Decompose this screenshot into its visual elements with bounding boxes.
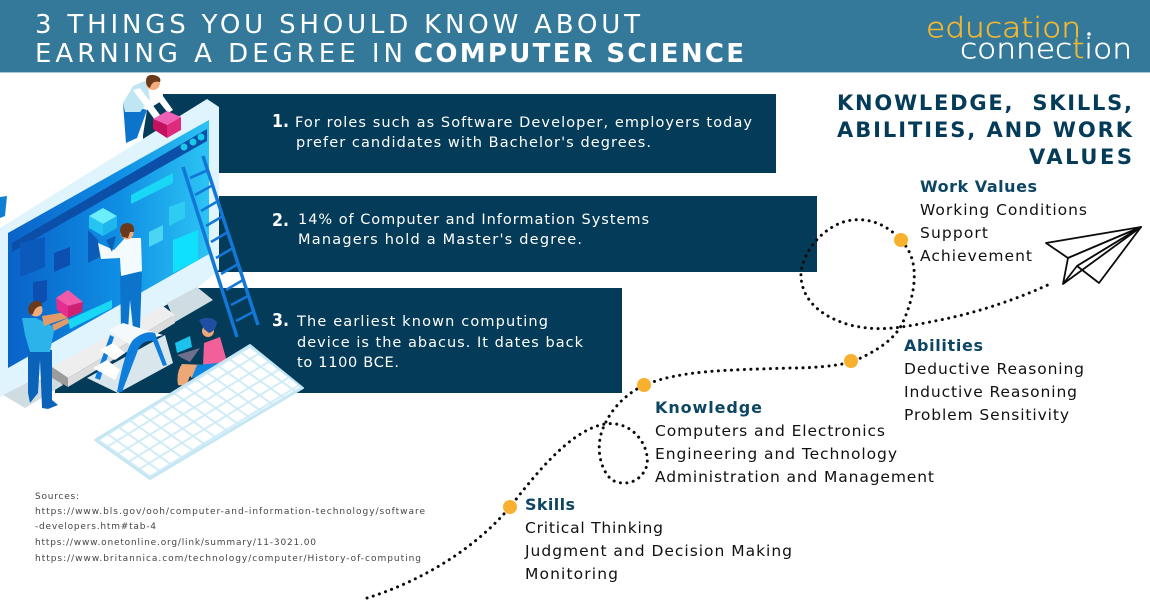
fact 2 text: 2. [272,210,289,231]
fact 1 text: 1. [272,111,289,132]
worker on top [123,75,173,143]
logo: education connection: connec tion [960,32,1132,65]
sources [35,492,425,564]
fact 1 text: prefer candidates with Bachelor's degrees. [296,135,651,151]
header bar [0,0,1150,73]
cyan cube [89,208,117,236]
knowledge list: Knowledge [655,398,762,417]
panel 3 [55,288,622,393]
illustration: isometric computer with workers [0,75,303,479]
title [35,10,744,69]
work values list: Support [920,224,988,242]
panel 2 [165,196,817,272]
screen title band [12,129,207,252]
work values list: Achievement [920,247,1032,265]
worker at screen [98,223,142,331]
skills list: Monitoring [525,565,618,583]
sources: https://www.bls.gov/ooh/computer-and-information-technology/software [35,507,425,517]
fact 1 text: For roles such as Software Developer, employers today [295,115,752,131]
pink cube top [153,111,181,138]
fact 2 text: Managers hold a Master's degree. [298,232,582,248]
abilities list: Abilities [904,336,983,355]
fact 3 text [272,310,584,371]
title: COMPUTER SCIENCE [414,39,744,69]
riser box under screen [52,306,175,387]
title: EARNING A DEGREE IN [35,39,403,69]
dotted flight path [367,220,1052,598]
abilities list [904,336,1084,424]
stool [93,323,167,392]
pink cube left [56,290,83,318]
monitor floor shadow [3,377,63,408]
icon: paper airplane [1046,227,1141,284]
screen tiles [20,173,198,329]
worker at left [22,301,69,409]
path milestones [503,233,908,514]
ladder [183,156,258,337]
section heading [837,91,1133,169]
knowledge list: Computers and Electronics [655,422,885,440]
panel 1 [143,94,776,173]
knowledge list: Engineering and Technology [655,445,897,463]
desk shadow right [167,287,213,322]
abilities list: Problem Sensitivity [904,406,1069,424]
work values list [920,177,1087,265]
floor under stool [87,335,173,393]
monitor screen [8,120,209,368]
section heading: VALUES [1029,145,1132,169]
work values list: Work Values [920,177,1037,196]
abilities list: Inductive Reasoning [904,383,1077,401]
small cup icon at edge [0,196,7,218]
fact 3 text: to 1100 BCE. [297,355,399,371]
knowledge list [655,398,934,486]
fact 2 text: 14% of Computer and Information Systems [298,212,649,228]
sources: Sources: [35,492,79,502]
fact 3 text: The earliest known computing [296,314,548,330]
keyboard [95,345,303,479]
sources: https://www.onetonline.org/link/summary/11-3021.00 [35,538,316,548]
fact 2 text [272,210,649,248]
logo: education connection: education [926,11,1081,44]
knowledge list: Administration and Management [655,468,934,486]
skills list: Judgment and Decision Making [524,542,792,560]
title: 3 THINGS YOU SHOULD KNOW ABOUT [35,10,640,40]
work values list: Working Conditions [920,201,1087,219]
sources: https://www.britannica.com/technology/computer/History-of-computing [35,554,421,564]
skills list [524,495,792,583]
monitor bezel [0,99,219,397]
section heading: ABILITIES, AND WORK [837,118,1133,142]
fact 3 text: device is the abacus. It dates back [297,335,584,351]
fact 3 text: 3. [272,310,289,331]
skills list: Critical Thinking [525,519,663,537]
abilities list: Deductive Reasoning [904,360,1084,378]
screen window dots [180,134,204,150]
skills list: Skills [525,495,575,514]
section heading: KNOWLEDGE, SKILLS, [837,91,1132,115]
seated woman with laptop [175,318,226,386]
fact 1 text [272,111,752,151]
logo: education connection [926,11,1132,65]
sources: -developers.htm#tab-4 [35,522,156,532]
